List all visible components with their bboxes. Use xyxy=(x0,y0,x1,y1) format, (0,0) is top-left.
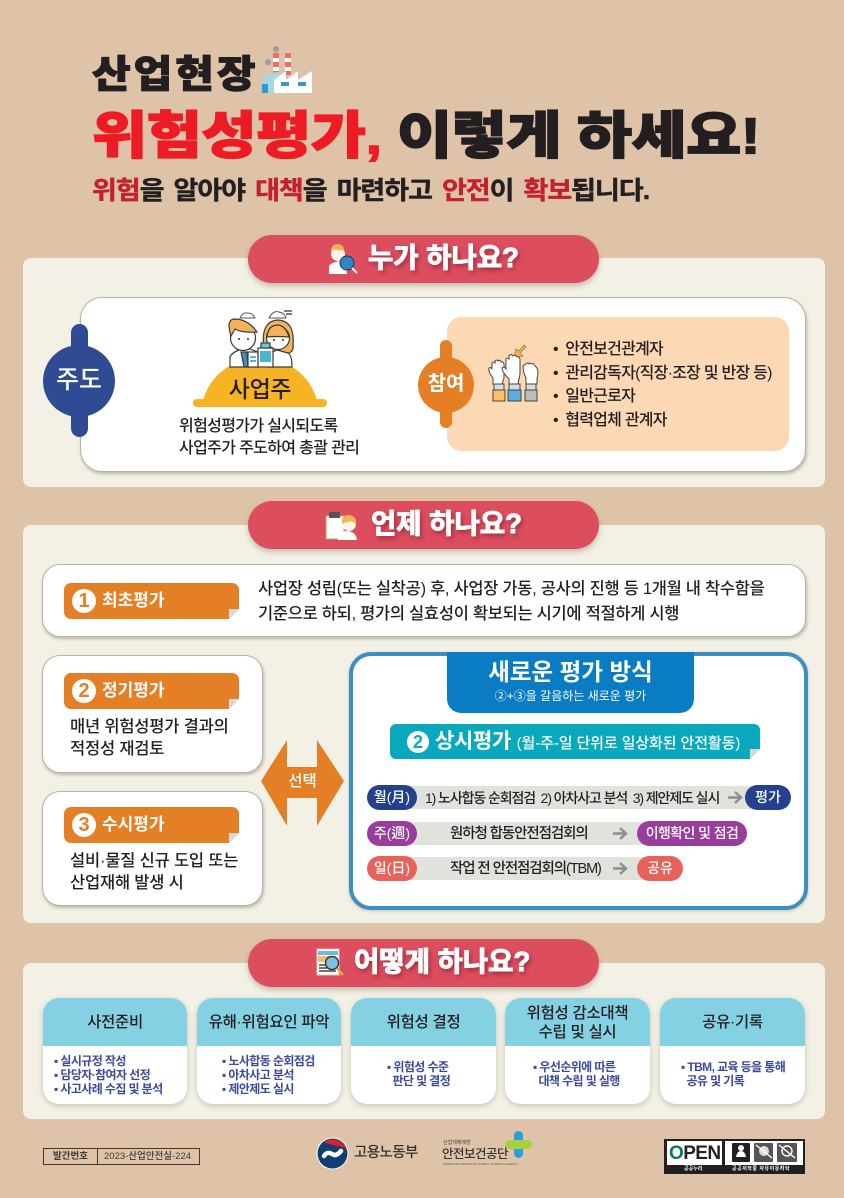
text: 수시평가 설명: 산업재해 발생 시 xyxy=(70,874,184,892)
step: 유해·위험요인 파악: 유해·위험요인 파악 xyxy=(209,1014,329,1031)
step: 위험성 결정: 위험성 결정 xyxy=(387,1014,460,1031)
text: 정기평가 설명: 적정성 재검토 xyxy=(70,740,164,758)
arrow: 선택: 선택 xyxy=(288,773,317,790)
text: 사업주 설명: 사업주가 주도하여 총괄 관리 xyxy=(179,440,359,457)
list: 참여자: • 안전보건관계자 xyxy=(553,341,663,358)
row: 일: 작업 전 안전점검회의(TBM) xyxy=(450,861,601,877)
text: 최초평가 설명: 기준으로 하되, 평가의 실효성이 확보되는 시기에 적절하게 시행 xyxy=(258,605,679,623)
heading text: 언제 하나요?: 언제 하나요? xyxy=(371,508,522,539)
header: 새로운 평가 방식: ②+③을 갈음하는 새로운 평가 xyxy=(495,689,646,703)
box: 참여자 xyxy=(447,317,789,451)
row: 일: 일(日) xyxy=(374,860,410,876)
panel: 어떻게 하나요 xyxy=(23,963,825,1119)
badge: 공공누리 OPEN: 공공저작물 자유이용허락 xyxy=(732,1166,790,1172)
list: 참여자: • 관리감독자(직장·조장 및 반장 등) xyxy=(553,365,772,382)
label: 최초평가: 최초평가 xyxy=(102,591,165,610)
badge: 주도: 주도 xyxy=(56,366,102,394)
text: 정기평가 설명: 매년 위험성평가 결과의 xyxy=(70,718,229,736)
badge: 참여 xyxy=(418,340,474,428)
icon: person with calendar xyxy=(326,512,357,540)
step: 유해·위험요인 파악: ▪ 아차사고 분석 xyxy=(222,1068,294,1082)
logo: 고용노동부 xyxy=(316,1138,418,1170)
step: 유해·위험요인 파악: ▪ 노사합동 순회점검 xyxy=(222,1054,315,1068)
label: 정기평가 xyxy=(64,673,239,709)
icon: factory xyxy=(262,46,312,93)
step: 공유·기록: ▪ TBM, 교육 등을 통해 xyxy=(681,1060,785,1074)
title line: 위험성평가, 이렇게 하세요! xyxy=(92,108,760,165)
row: 주: 주(週) xyxy=(374,825,410,841)
row: 주: 이행확인 및 점검 xyxy=(646,825,738,841)
row: 주: 원하청 합동안전점검회의 xyxy=(450,826,588,842)
text: 사업주 설명: 위험성평가가 실시되도록 xyxy=(179,418,338,435)
panel: 새로운 평가 방식 xyxy=(349,652,808,910)
card: 정기평가 xyxy=(42,655,263,773)
step: 위험성 결정: 판단 및 결정 xyxy=(392,1074,450,1088)
step: 위험성 감소대책 수립 및 실시: 위험성 감소대책 xyxy=(527,1005,628,1022)
label: 수시평가: 3 xyxy=(78,814,90,836)
header: 새로운 평가 방식: 새로운 평가 방식 xyxy=(488,659,653,685)
step: 사전준비: ▪ 사고사례 수집 및 분석 xyxy=(54,1082,163,1096)
row: 일: 공유 xyxy=(647,860,673,876)
publication number box: 2023-산업안전실-224 xyxy=(104,1151,191,1162)
label: 상시평가: 상시평가 (월-주-일 단위로 일상화된 안전활동) xyxy=(435,730,740,753)
arrow: 선택 xyxy=(261,740,344,826)
text: 최초평가 설명: 사업장 성립(또는 실착공) 후, 사업장 가동, 공사의 진행 등 1개월 내 착수함을 xyxy=(258,580,764,598)
step: 공유·기록: 공유·기록 xyxy=(702,1014,763,1031)
card: 주도·참여 xyxy=(80,297,806,472)
label: 사업주: 사업주 xyxy=(229,376,291,402)
step: 위험성 결정: ▪ 위험성 수준 xyxy=(387,1060,448,1074)
step: 사전준비: 사전준비 xyxy=(87,1014,143,1031)
list: 참여자 xyxy=(553,340,772,429)
heading pill: 어떻게 하나요 xyxy=(248,939,599,987)
heading pill: 누가 하나요 xyxy=(248,235,599,283)
step: 사전준비: ▪ 실시규정 작성 xyxy=(54,1054,126,1068)
badge: 공공누리 OPEN: OPEN xyxy=(669,1143,720,1164)
icon: raised hands xyxy=(488,344,538,402)
text: 사업주 설명 xyxy=(179,417,359,457)
step: 사전준비 xyxy=(43,998,187,1104)
icon: document with magnifier xyxy=(316,948,344,976)
title line: 위험성평가, 이렇게 하세요!: 위험성평가, xyxy=(92,108,382,165)
label: 최초평가: 1 xyxy=(78,590,90,612)
badge: 공공누리 OPEN: 공공누리 xyxy=(684,1166,702,1172)
list: 참여자: • 협력업체 관계자 xyxy=(553,412,667,429)
step: 공유·기록 xyxy=(660,998,805,1104)
card: 최초평가 xyxy=(42,564,806,637)
panel: 누가 하나요 xyxy=(23,258,825,487)
logo: 고용노동부: 고용노동부 xyxy=(354,1145,418,1161)
badge: 참여: 참여 xyxy=(428,373,464,395)
text: 수시평가 설명: 설비·물질 신규 도입 또는 xyxy=(70,852,238,870)
step: 위험성 감소대책 수립 및 실시: ▪ 우선순위에 따른 xyxy=(533,1060,615,1074)
step: 위험성 감소대책 수립 및 실시 xyxy=(505,998,650,1104)
icon: person with magnifier xyxy=(329,244,358,274)
icon: hard hat with employers xyxy=(193,310,327,407)
label: 정기평가: 2 xyxy=(78,680,90,702)
row: 월: 평가 xyxy=(755,789,781,805)
step: 유해·위험요인 파악: ▪ 제안제도 실시 xyxy=(222,1082,294,1096)
row: 월: 월(月) xyxy=(374,789,410,805)
heading pill: 언제 하나요 xyxy=(248,501,599,549)
label: 상시평가 xyxy=(390,724,760,759)
subtitle: 위험을 알아야 대책을 마련하고 안전이 확보됩니다. xyxy=(92,177,649,205)
label: 정기평가: 정기평가 xyxy=(102,681,165,700)
badge: 주도 xyxy=(43,324,115,437)
label: 최초평가 xyxy=(64,583,239,619)
logo: 안전보건공단: 안전보건공단 xyxy=(442,1147,508,1161)
row: 월: 1) 노사합동 순회점검 2) 아차사고 분석 3) 제안제도 실시 xyxy=(425,790,719,806)
logo: 안전보건공단: KOREA OCCUPATIONAL SAFETY & HEALTH AGENCY xyxy=(443,1162,518,1166)
step: 사전준비: ▪ 담당자·참여자 선정 xyxy=(54,1068,150,1082)
panel: 언제 하나요 xyxy=(23,525,825,923)
text: 수시평가 설명 xyxy=(70,852,238,892)
step: 공유·기록: 공유 및 기록 xyxy=(686,1074,744,1088)
text: 정기평가 설명 xyxy=(70,718,229,758)
label: 상시평가: 2 xyxy=(413,732,423,752)
step: 위험성 감소대책 수립 및 실시: 대책 수립 및 실행 xyxy=(538,1074,620,1088)
heading text: 어떻게 하나요?: 어떻게 하나요? xyxy=(354,946,530,977)
badge: 공공누리 OPEN xyxy=(664,1139,805,1174)
card: 수시평가 xyxy=(42,791,263,906)
step: 위험성 감소대책 수립 및 실시: 수립 및 실시 xyxy=(539,1024,616,1041)
heading text: 누가 하나요?: 누가 하나요? xyxy=(368,242,519,273)
publication number box xyxy=(43,1148,200,1165)
label: 수시평가 xyxy=(64,807,239,843)
publication number box: 발간번호 xyxy=(53,1151,88,1162)
row: 주 xyxy=(367,821,747,846)
label: 수시평가: 수시평가 xyxy=(102,815,165,834)
logo: 안전보건공단 xyxy=(442,1131,532,1166)
title line: 위험성평가, 이렇게 하세요!: 이렇게 하세요! xyxy=(397,108,760,165)
header: 새로운 평가 방식 xyxy=(447,652,694,713)
step: 유해·위험요인 파악 xyxy=(197,998,341,1104)
text: 최초평가 설명 xyxy=(258,580,764,623)
logo: 안전보건공단: 산업재해예방 xyxy=(443,1140,471,1146)
step: 위험성 결정 xyxy=(351,998,496,1104)
row: 일 xyxy=(367,856,683,881)
row: 월 xyxy=(367,785,791,810)
list: 참여자: • 일반근로자 xyxy=(553,388,635,405)
title line: 산업현장: 산업현장 xyxy=(92,53,259,96)
